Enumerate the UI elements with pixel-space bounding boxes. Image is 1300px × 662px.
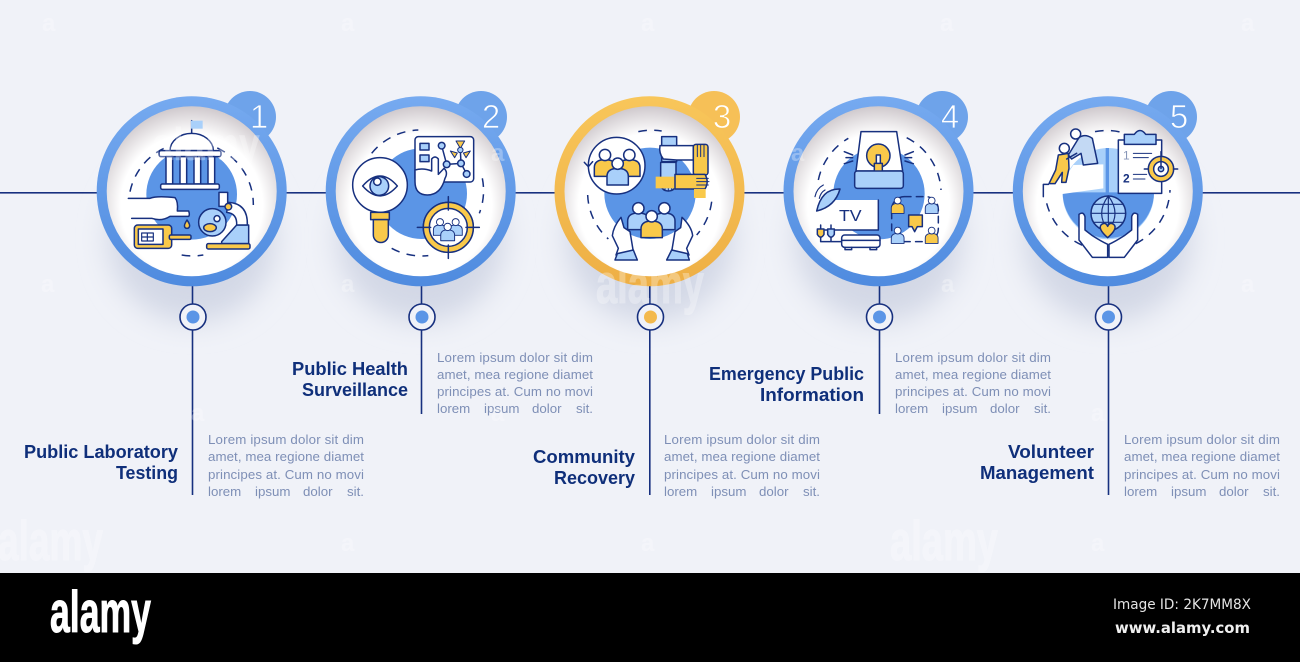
footer logo: alamy bbox=[50, 580, 151, 645]
step 4 connector and node bbox=[795, 154, 963, 414]
stock photo watermarks: a bbox=[940, 10, 954, 37]
step 4 heading bbox=[709, 364, 864, 405]
stock photo watermarks: a bbox=[42, 10, 56, 37]
step 1 description: Lorem ipsum dolor sit dim bbox=[208, 432, 364, 447]
stock photo watermarks: alamy bbox=[596, 252, 704, 315]
stock photo watermarks: a bbox=[341, 271, 355, 298]
step 5 description: Lorem ipsum dolor sit dim bbox=[1124, 432, 1280, 447]
step 3 description: ipsum bbox=[711, 484, 746, 499]
stock photo watermarks: a bbox=[341, 10, 355, 37]
step 5 description bbox=[1124, 432, 1280, 499]
step 1 numbered ring bbox=[97, 91, 287, 286]
stock photo watermarks: a bbox=[191, 400, 205, 427]
step 1 numbered ring: 1 bbox=[250, 98, 268, 135]
icon: magnifier with eye, data panel and target on people bbox=[353, 130, 484, 258]
step 1 description: principes at. Cum no movi bbox=[208, 467, 364, 482]
step 3 heading bbox=[533, 447, 635, 488]
step 1 description bbox=[208, 432, 364, 499]
step 1 description: ipsum bbox=[255, 484, 290, 499]
step 3 connector and node bbox=[566, 154, 734, 495]
step 4 heading: Emergency Public bbox=[709, 364, 864, 384]
step 3 numbered ring: 3 bbox=[713, 98, 731, 135]
stock photo watermarks: a bbox=[941, 271, 955, 298]
step 4: emergency public information bbox=[709, 91, 1051, 416]
step 3 heading: Recovery bbox=[554, 468, 635, 488]
step 5 description: dolor bbox=[1219, 484, 1249, 499]
step 4 description: ipsum bbox=[942, 401, 977, 416]
icon: climbers, clipboard with target, globe held in hands: 2 bbox=[1123, 171, 1130, 185]
step 4 description: Lorem ipsum dolor sit dim bbox=[895, 350, 1051, 365]
stock photo watermarks: a bbox=[1241, 10, 1255, 37]
stock photo watermarks: alamy bbox=[890, 509, 998, 572]
step 1 heading: Testing bbox=[116, 463, 178, 483]
step 1: public laboratory testing bbox=[24, 91, 364, 499]
step 3 description: dolor bbox=[759, 484, 789, 499]
step 3 description: amet, mea regione diamet bbox=[664, 449, 820, 464]
step 2 description bbox=[437, 350, 593, 416]
step 2 heading: Public Health bbox=[292, 359, 408, 379]
step 1 heading bbox=[24, 442, 178, 483]
icon: climbers, clipboard with target, globe held in hands bbox=[1043, 129, 1178, 257]
stock photo watermarks: a bbox=[641, 10, 655, 37]
step 5 description: sit. bbox=[1263, 484, 1280, 499]
stock photo watermarks: a bbox=[491, 140, 505, 167]
step 4 description: sit. bbox=[1034, 401, 1051, 416]
step 2 description: principes at. Cum no movi bbox=[437, 384, 593, 399]
step 2 description: dolor bbox=[532, 401, 562, 416]
step 2 description: amet, mea regione diamet bbox=[437, 367, 593, 382]
step 3 description bbox=[664, 432, 820, 499]
step 4 description: amet, mea regione diamet bbox=[895, 367, 1051, 382]
stock photo watermarks: a bbox=[1091, 400, 1105, 427]
stock photo watermarks: a bbox=[641, 530, 655, 557]
step 2 heading: Surveillance bbox=[302, 380, 408, 400]
step 5 connector and node bbox=[1024, 154, 1192, 495]
step 2 description: sit. bbox=[576, 401, 593, 416]
step 1 description: sit. bbox=[347, 484, 364, 499]
step 5 numbered ring: 5 bbox=[1170, 98, 1188, 135]
step 2 heading bbox=[292, 359, 408, 400]
step 5 description: principes at. Cum no movi bbox=[1124, 467, 1280, 482]
stock photo watermarks: a bbox=[791, 140, 805, 167]
icon: community, joined hands and caring hands bbox=[584, 130, 712, 260]
step 3: community recovery bbox=[533, 91, 820, 499]
step 3 description: lorem bbox=[664, 484, 697, 499]
step 2 description: ipsum bbox=[484, 401, 519, 416]
step 1 heading: Public Laboratory bbox=[24, 442, 178, 462]
step 4 description: dolor bbox=[990, 401, 1020, 416]
stock photo watermarks: a bbox=[341, 530, 355, 557]
step 3 heading: Community bbox=[533, 447, 635, 467]
step 5 description: amet, mea regione diamet bbox=[1124, 449, 1280, 464]
step 5 heading: Management bbox=[980, 463, 1094, 483]
footer bar bbox=[0, 573, 1300, 662]
step 4 numbered ring: 4 bbox=[941, 98, 959, 135]
step 2 numbered ring bbox=[326, 91, 516, 286]
step 5 heading: Volunteer bbox=[1008, 442, 1094, 462]
stock photo watermarks: a bbox=[1241, 271, 1255, 298]
step 3 description: sit. bbox=[803, 484, 820, 499]
icon: government lab, hand, glucometer and microscope bbox=[128, 121, 253, 256]
icon: climbers, clipboard with target, globe held in hands: 1 bbox=[1123, 149, 1130, 163]
step 2 description: lorem bbox=[437, 401, 470, 416]
step 4 description bbox=[895, 350, 1051, 416]
step 1 description: amet, mea regione diamet bbox=[208, 449, 364, 464]
step 2 description: Lorem ipsum dolor sit dim bbox=[437, 350, 593, 365]
step 2 numbered ring: 2 bbox=[482, 98, 500, 135]
step 5 numbered ring bbox=[1013, 91, 1203, 286]
step 1 description: dolor bbox=[303, 484, 333, 499]
step 2: public health surveillance bbox=[292, 91, 593, 416]
step 3 numbered ring bbox=[554, 91, 744, 286]
step 5 heading bbox=[980, 442, 1094, 483]
step 5: volunteer management bbox=[980, 91, 1280, 499]
step 1 description: lorem bbox=[208, 484, 241, 499]
icon: alarm beacon, television and connected people: TV bbox=[839, 208, 862, 225]
step 5 description: lorem bbox=[1124, 484, 1157, 499]
step 1 connector and node bbox=[108, 154, 276, 495]
step 2 connector and node bbox=[337, 154, 505, 414]
stock photo watermarks: a bbox=[491, 400, 505, 427]
step 4 numbered ring bbox=[784, 91, 974, 286]
footer image id: Image ID: 2K7MM8X bbox=[1113, 597, 1251, 613]
step 3 description: principes at. Cum no movi bbox=[664, 467, 820, 482]
step 4 description: principes at. Cum no movi bbox=[895, 384, 1051, 399]
icon: alarm beacon, television and connected people bbox=[815, 132, 941, 250]
timeline horizontal line bbox=[0, 192, 1300, 194]
step 4 description: lorem bbox=[895, 401, 928, 416]
step 4 heading: Information bbox=[760, 385, 864, 405]
stock photo watermarks: alamy bbox=[0, 509, 103, 572]
stock photo watermarks: a bbox=[1091, 530, 1105, 557]
step 3 description: Lorem ipsum dolor sit dim bbox=[664, 432, 820, 447]
stock photo watermarks: alamy bbox=[152, 118, 260, 170]
step 5 description: ipsum bbox=[1171, 484, 1206, 499]
stock photo watermarks: a bbox=[41, 271, 55, 298]
footer url: www.alamy.com bbox=[1115, 619, 1250, 637]
